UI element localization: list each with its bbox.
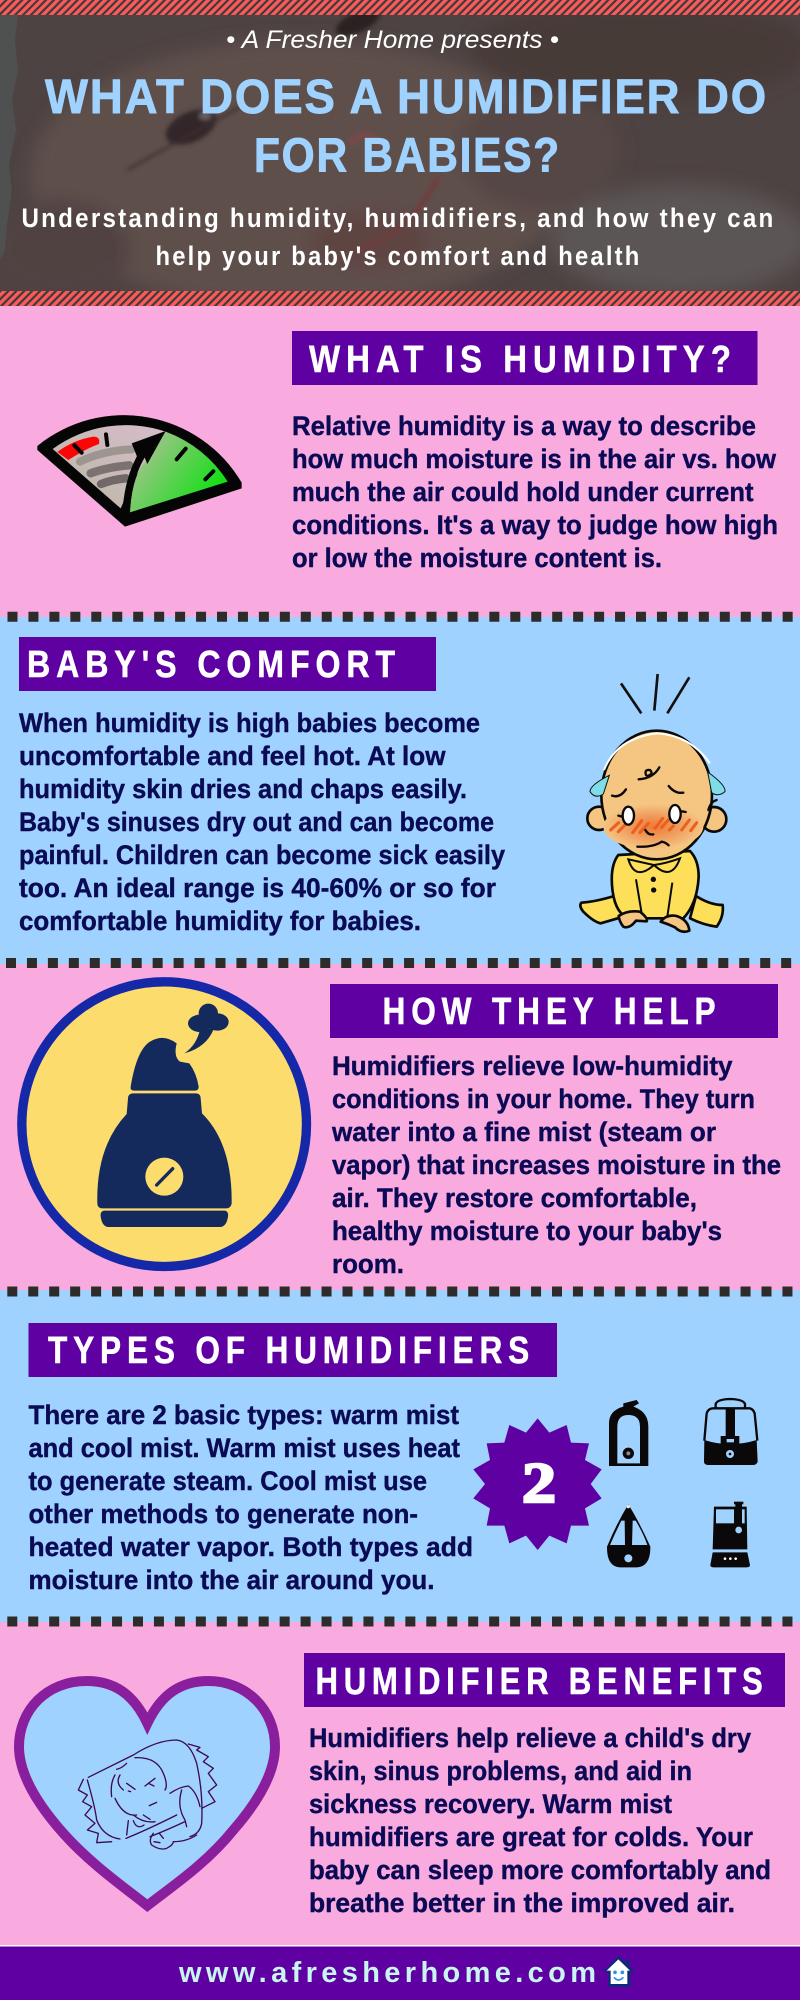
icon: humidity gauge — [37, 415, 242, 527]
text block: comfortable humidity for babies. — [19, 906, 421, 936]
heading: TYPES OF HUMIDIFIERS — [48, 1330, 535, 1372]
icon: large tank humidifier — [704, 1399, 758, 1465]
icon: uncomfortable baby — [580, 674, 726, 932]
text block: vapor) that increases moisture in the — [332, 1150, 781, 1180]
text block — [331, 1051, 781, 1279]
heading — [292, 331, 758, 385]
panel: humidifier benefits — [0, 1622, 800, 1946]
heading — [28, 1323, 557, 1377]
panel: baby's comfort — [0, 617, 800, 964]
text block: painful. Children can become sick easily — [19, 840, 505, 870]
website address: www.afresherhome.com — [178, 1957, 596, 1989]
title: WHAT DOES A HUMIDIFIER DO — [45, 71, 768, 124]
text block: too. An ideal range is 40-60% or so for — [19, 873, 496, 903]
stripe band top — [0, 0, 800, 15]
icon: smiling house — [603, 1956, 635, 1987]
text block: There are 2 basic types: warm mist — [28, 1400, 459, 1430]
text block: Humidifiers help relieve a child's dry — [309, 1723, 751, 1753]
photo background: baby face — [0, 15, 800, 291]
icon: square tank humidifier — [710, 1502, 750, 1567]
text block: or low the moisture content is. — [292, 543, 662, 573]
panel: types of humidifiers — [0, 1290, 800, 1622]
text block — [28, 1400, 473, 1595]
footer — [0, 1945, 800, 2000]
subtitle: help your baby's comfort and health — [156, 241, 642, 271]
text block: conditions. It's a way to judge how high — [292, 510, 778, 540]
text block: room. — [332, 1249, 404, 1279]
panel: header banner — [0, 0, 800, 310]
heading: BABY'S COMFORT — [27, 644, 401, 686]
panel: how they help — [0, 964, 800, 1290]
icon: heart with sleeping baby — [19, 1681, 275, 1906]
text block: humidifiers are great for colds. Your — [309, 1822, 753, 1852]
text block: water into a fine mist (steam or — [331, 1117, 716, 1147]
text block: heated water vapor. Both types add — [28, 1532, 473, 1562]
text block: sickness recovery. Warm mist — [309, 1789, 672, 1819]
text block: When humidity is high babies become — [19, 708, 480, 738]
text block: Humidifiers relieve low-humidity — [332, 1051, 732, 1081]
text block: breathe better in the improved air. — [309, 1888, 735, 1918]
heading: WHAT IS HUMIDITY? — [309, 339, 737, 381]
text block: to generate steam. Cool mist use — [28, 1466, 427, 1496]
icon: teardrop humidifier — [607, 1504, 650, 1567]
title: FOR BABIES? — [254, 130, 561, 182]
icon: warm mist humidifier 1 — [609, 1400, 648, 1466]
text block: healthy moisture to your baby's — [332, 1216, 722, 1246]
subtitle — [22, 203, 776, 271]
text block: Baby's sinuses dry out and can become — [19, 807, 494, 837]
text block: uncomfortable and feel hot. At low — [19, 741, 446, 771]
text block: how much moisture is in the air vs. how — [292, 444, 777, 474]
stripe band bottom — [0, 291, 800, 306]
heading — [330, 984, 778, 1038]
text block: moisture into the air around you. — [28, 1565, 434, 1595]
heading: HOW THEY HELP — [382, 991, 722, 1033]
text block: Relative humidity is a way to describe — [292, 411, 756, 441]
text block: conditions in your home. They turn — [332, 1084, 755, 1114]
text block: humidity skin dries and chaps easily. — [19, 774, 467, 804]
text block — [292, 411, 778, 573]
text block: baby can sleep more comfortably and — [309, 1855, 771, 1885]
text block — [309, 1723, 771, 1918]
badge: number 2 starburst: 2 — [522, 1452, 556, 1515]
presenter line: • A Fresher Home presents • — [226, 26, 559, 54]
panel: what is humidity — [0, 306, 800, 617]
icon: humidifier in yellow circle — [22, 982, 306, 1266]
text block: much the air could hold under current — [292, 477, 754, 507]
text block: other methods to generate non- — [28, 1499, 418, 1529]
text block: air. They restore comfortable, — [332, 1183, 697, 1213]
text block — [19, 708, 505, 936]
text block: and cool mist. Warm mist uses heat — [28, 1433, 460, 1463]
title — [45, 71, 768, 182]
badge: number 2 starburst — [473, 1418, 602, 1550]
text block: skin, sinus problems, and aid in — [309, 1756, 692, 1786]
